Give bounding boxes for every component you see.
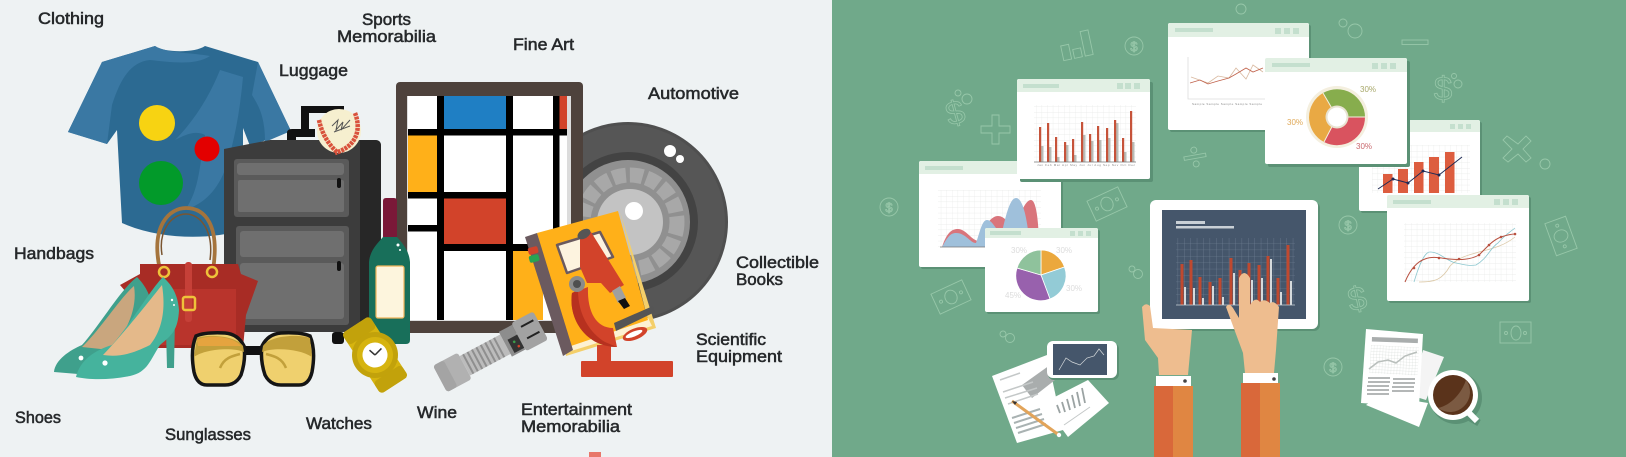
background outline icons: $ — [1344, 278, 1370, 318]
card: bar chart — [1017, 79, 1153, 182]
label: Scientific Equipment: Scientific — [696, 330, 767, 349]
label: Fine Art: Fine Art — [513, 35, 574, 54]
icon: handbag — [120, 208, 258, 348]
background outline icons: $ — [885, 200, 893, 215]
label: Shoes: Shoes — [15, 408, 61, 427]
card: curve chart — [1387, 195, 1531, 303]
background outline icons: $ — [941, 92, 969, 133]
label: Sports Memorabilia: Sports — [362, 10, 411, 29]
papers and coffee cup — [1361, 329, 1482, 427]
icon: tire — [528, 122, 728, 322]
icon: microscope — [569, 227, 673, 377]
label: Entertainment Memorabilia: Entertainment — [521, 400, 632, 419]
panel: analytics — [832, 0, 1626, 457]
label: Sports Memorabilia: Memorabilia — [337, 27, 437, 46]
icon: wine bottle — [369, 198, 410, 344]
icon: luggage — [224, 106, 381, 344]
card: bar chart: Jan Feb Mar Apr May Jun Jul Aug Sep Nov Oct Dec — [1037, 163, 1136, 167]
label: Automotive: Automotive — [648, 84, 739, 103]
icon: framed abstract painting — [396, 82, 583, 333]
card: pie chart: 30% — [1011, 246, 1027, 255]
icon: sunglasses — [192, 333, 314, 385]
label: Collectible Books: Collectible — [736, 253, 819, 272]
left hand and sleeve — [1142, 304, 1193, 457]
card: line chart: Sample Sample Sample Sample Sample — [1192, 102, 1262, 106]
background outline icons: $ — [1344, 218, 1352, 233]
label: Entertainment Memorabilia: Memorabilia — [521, 417, 621, 436]
label: Sunglasses: Sunglasses — [165, 425, 251, 444]
background outline icons: $ — [1434, 70, 1452, 107]
papers, phone and pencil — [992, 341, 1119, 443]
label: Scientific Equipment: Equipment — [696, 347, 782, 366]
icon: t-shirt — [68, 46, 291, 237]
right hand and sleeve — [1226, 273, 1280, 457]
card: donut chart — [1265, 58, 1410, 167]
background outline icons: $ — [1329, 360, 1337, 375]
label: Handbags: Handbags — [14, 244, 94, 263]
icon: wristwatch — [336, 312, 414, 398]
label: Watches: Watches — [306, 414, 372, 433]
label: Luggage: Luggage — [279, 61, 348, 80]
card: pie chart — [985, 228, 1100, 314]
card: donut chart: 30% — [1287, 118, 1303, 127]
label: Wine: Wine — [417, 403, 457, 422]
card: donut chart: 30% — [1360, 85, 1376, 94]
cropped red marker — [589, 452, 601, 457]
icon: signed baseball — [317, 109, 361, 153]
card: pie chart: 45% — [1005, 291, 1021, 300]
background outline icons — [880, 4, 1577, 376]
icon: collectible book — [525, 211, 656, 356]
card: orange bar and line chart — [1359, 120, 1482, 213]
card: line chart — [1168, 23, 1311, 132]
card: donut chart: 30% — [1356, 142, 1372, 151]
label: Clothing: Clothing — [38, 9, 104, 28]
tablet with bar chart — [1150, 200, 1320, 331]
card: pie chart: 30% — [1056, 246, 1072, 255]
label: Collectible Books: Books — [736, 270, 783, 289]
background outline icons: $ — [1130, 39, 1138, 54]
card: area chart — [919, 161, 1063, 269]
card: pie chart: 30% — [1066, 284, 1082, 293]
icon: lightsaber — [432, 311, 548, 393]
panel: collectibles — [0, 0, 832, 457]
icon: high-heel shoes — [54, 277, 179, 379]
